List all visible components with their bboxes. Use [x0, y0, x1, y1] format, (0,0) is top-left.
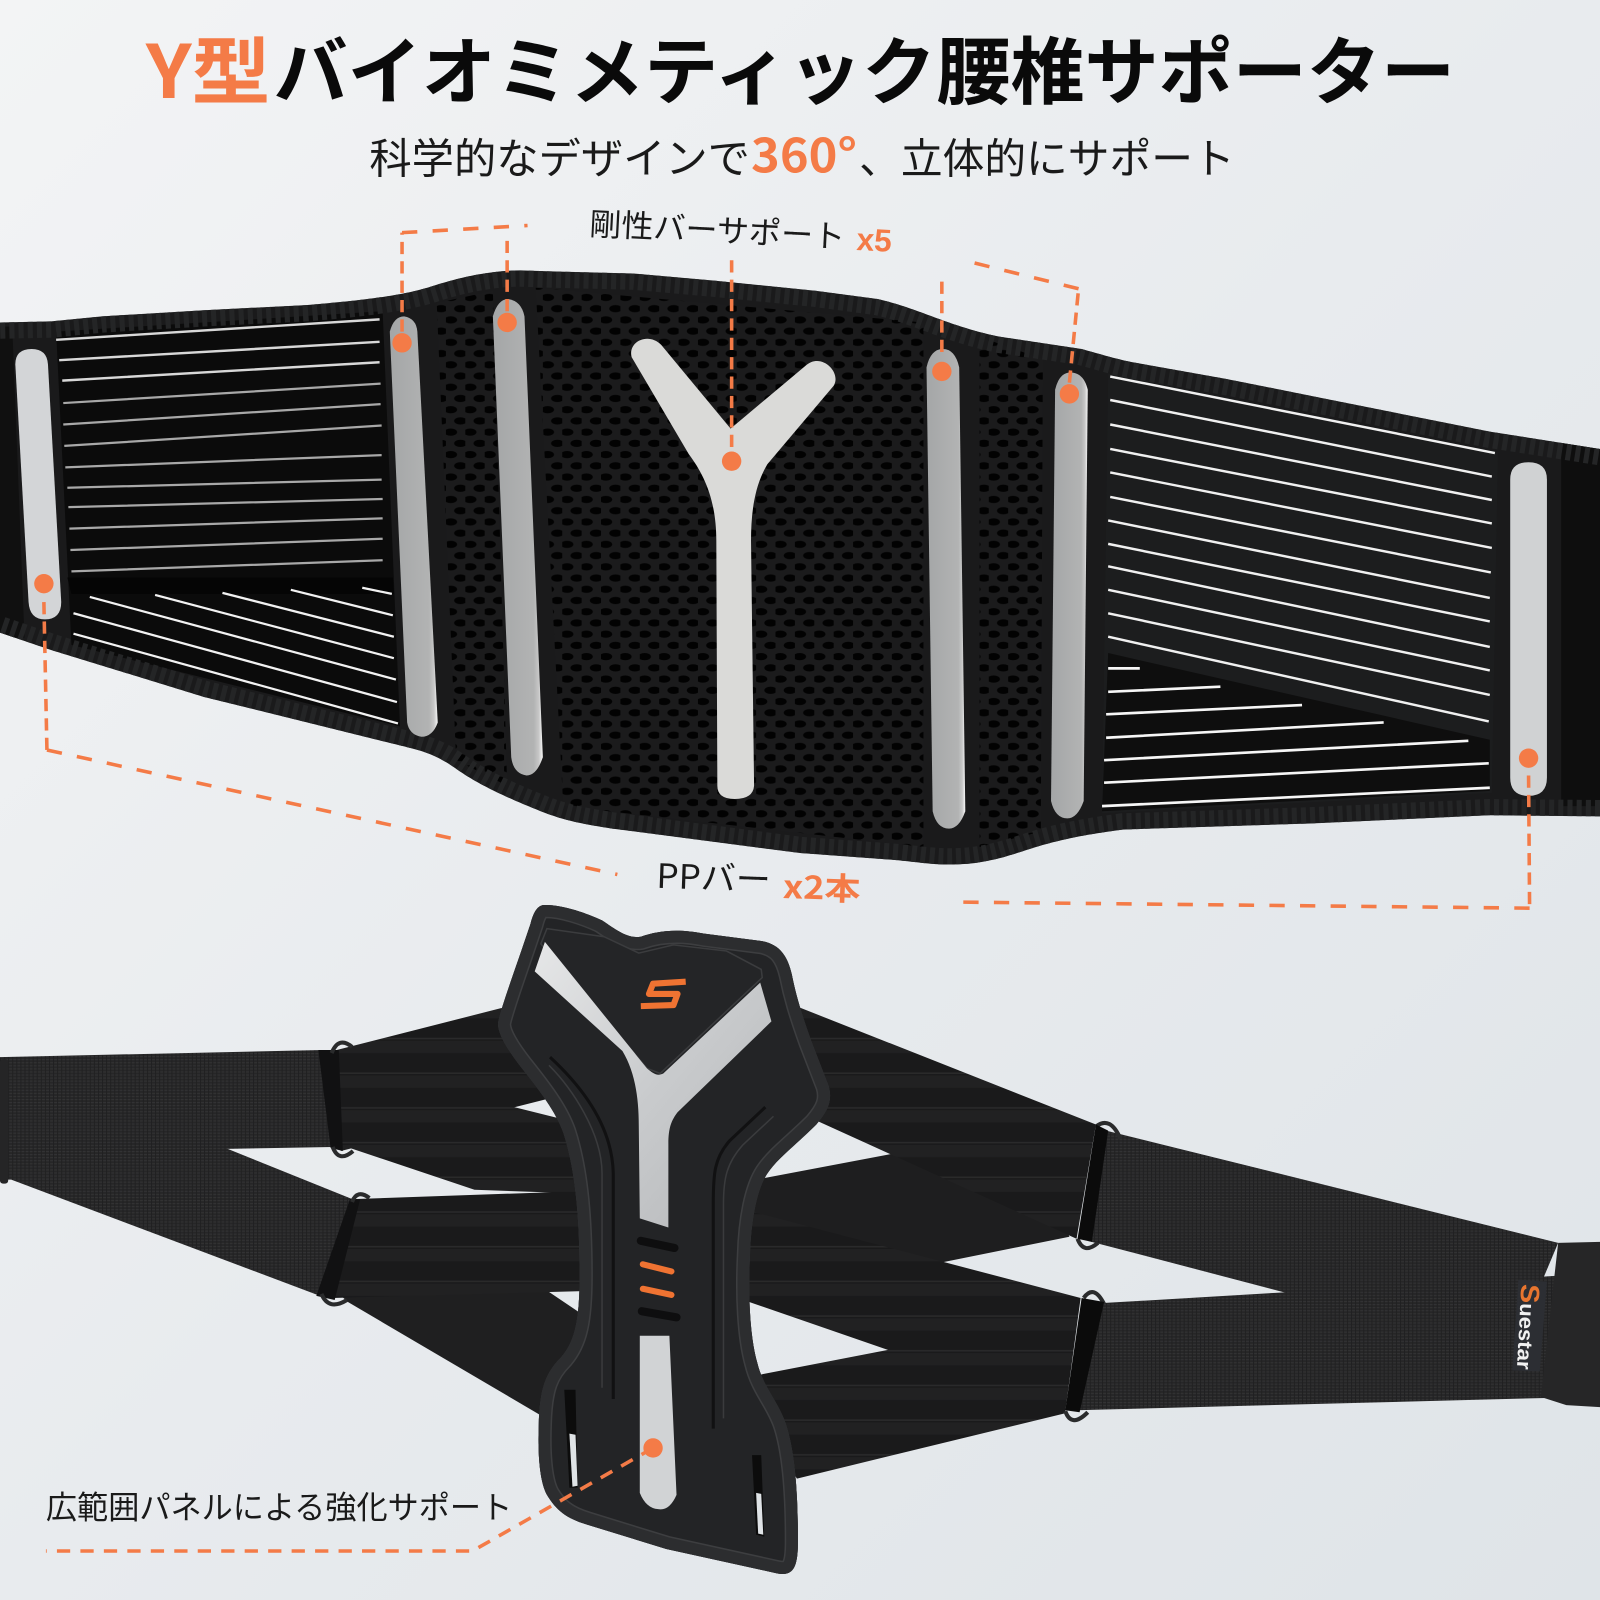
subtitle: 科学的なデザインで	[369, 125, 750, 186]
straps behind panel, right	[735, 1002, 1561, 1479]
Y rigid bar	[631, 339, 836, 799]
mesh panels	[437, 288, 1043, 847]
callout: PP bars label: PPバー	[656, 849, 772, 902]
bottom product: strap assembly	[0, 1002, 1600, 1479]
callout: PP bars label	[656, 849, 862, 911]
panel ridges	[550, 1057, 765, 1429]
top product: lumbar belt	[0, 270, 1600, 865]
rigid bar 2	[493, 299, 543, 776]
leader lines	[44, 226, 1530, 1551]
title: バイオミメティック腰椎サポーター	[273, 14, 1455, 120]
rigid bar 4	[1051, 372, 1088, 818]
rigid bar 3	[927, 349, 965, 829]
callout: PP bars label: x2本	[782, 862, 862, 911]
panel top triangle	[541, 929, 762, 1073]
subtitle: 360°	[751, 118, 857, 186]
left end panel	[0, 327, 24, 638]
rigid bar 1	[390, 316, 438, 737]
panel slots	[564, 1390, 764, 1537]
callout: rigid bars label: x5	[856, 221, 893, 259]
left elastic panel	[56, 311, 400, 727]
leather cuff	[1541, 1242, 1600, 1407]
panel lower metal plate	[640, 1336, 677, 1509]
belt body	[0, 270, 1600, 865]
belt stitched edge	[0, 270, 1600, 865]
brand label: S uestar	[1511, 1283, 1545, 1371]
subtitle: 、立体的にサポート	[859, 125, 1235, 186]
subtitle	[369, 118, 1235, 186]
callout: panel label: 広範囲パネルによる強化サポート	[46, 1482, 512, 1528]
right end panel	[1561, 434, 1600, 806]
right elastic panel	[1102, 373, 1498, 813]
title: Y型	[145, 14, 270, 120]
callout: rigid bars label: 剛性バーサポート	[588, 199, 846, 258]
logo S mark	[641, 982, 686, 1006]
panel inner groove	[498, 905, 830, 1574]
straps behind panel, left	[0, 1005, 592, 1418]
PP bar right	[1510, 462, 1547, 796]
Y-shaped support panel	[498, 905, 830, 1574]
panel grooves and orange stripes	[641, 1241, 677, 1317]
panel Y metal plate	[535, 942, 771, 1228]
PP bar left	[15, 349, 61, 619]
marker dots	[34, 313, 1538, 1458]
